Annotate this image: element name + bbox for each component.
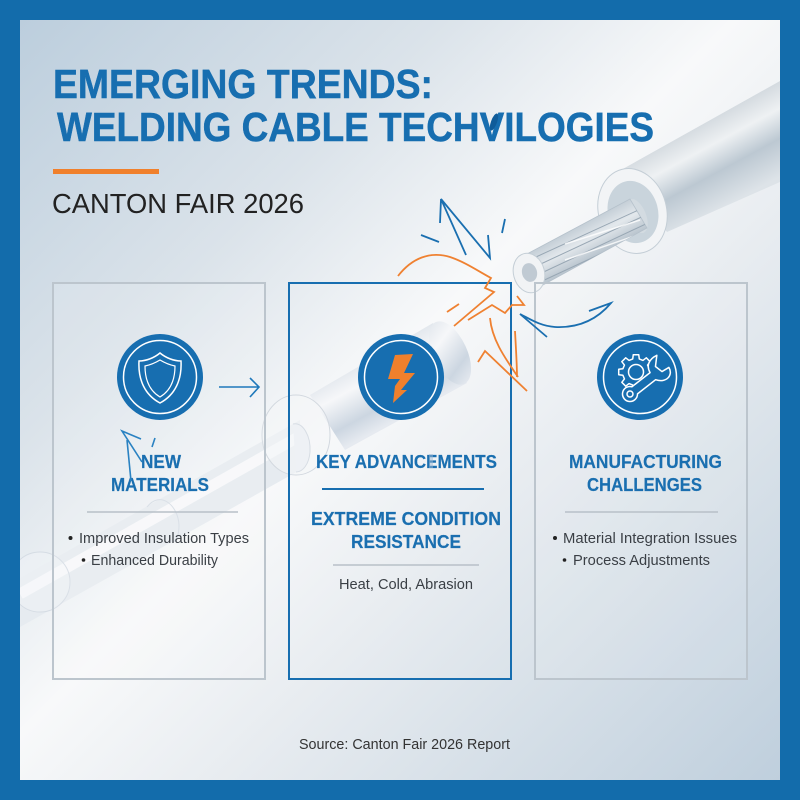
icon: small blue spark near new materials	[122, 431, 155, 481]
bullet list: Material Integration Issues	[563, 530, 737, 547]
icon: orange welding sparks	[398, 255, 527, 391]
bullet list: Improved Insulation Types	[79, 530, 249, 547]
text: details: Heat, Cold, Abrasion	[339, 576, 473, 593]
heading: MANUFACTURING	[569, 452, 722, 472]
subheading: RESISTANCE	[351, 532, 461, 552]
title: WELDING CABLE TECHVILOGIES	[57, 104, 654, 150]
heading: MATERIALS	[111, 475, 209, 495]
bullet list: Enhanced Durability	[91, 552, 218, 569]
bullet list	[553, 530, 737, 569]
bullet list	[68, 530, 249, 569]
panel: key advancements	[289, 283, 511, 679]
heading: NEW	[141, 452, 181, 472]
icon: shield	[117, 334, 203, 420]
icon: lightning bolt	[358, 334, 444, 420]
panel: manufacturing challenges	[535, 283, 747, 679]
panel: new materials	[53, 283, 265, 679]
heading	[569, 452, 722, 495]
title: EMERGING TRENDS:	[53, 61, 433, 107]
icon: blue sparks	[421, 199, 505, 258]
icon: gear and wrench	[597, 334, 683, 420]
subheading: EXTREME CONDITION	[311, 509, 501, 529]
source note: Source: Canton Fair 2026 Report	[299, 736, 511, 753]
heading	[111, 452, 209, 495]
heading: CHALLENGES	[587, 475, 702, 495]
subtitle: CANTON FAIR 2026	[52, 188, 304, 219]
heading: KEY ADVANCEMENTS	[316, 452, 497, 472]
arrow: between panels	[219, 378, 259, 397]
stripped cable illustration	[509, 81, 780, 296]
bullet list: Process Adjustments	[573, 552, 710, 569]
title	[53, 61, 654, 150]
subheading	[311, 509, 501, 552]
orange accent bar	[53, 169, 159, 174]
faint cable background	[10, 315, 480, 627]
arrow: blue curved	[520, 303, 611, 337]
